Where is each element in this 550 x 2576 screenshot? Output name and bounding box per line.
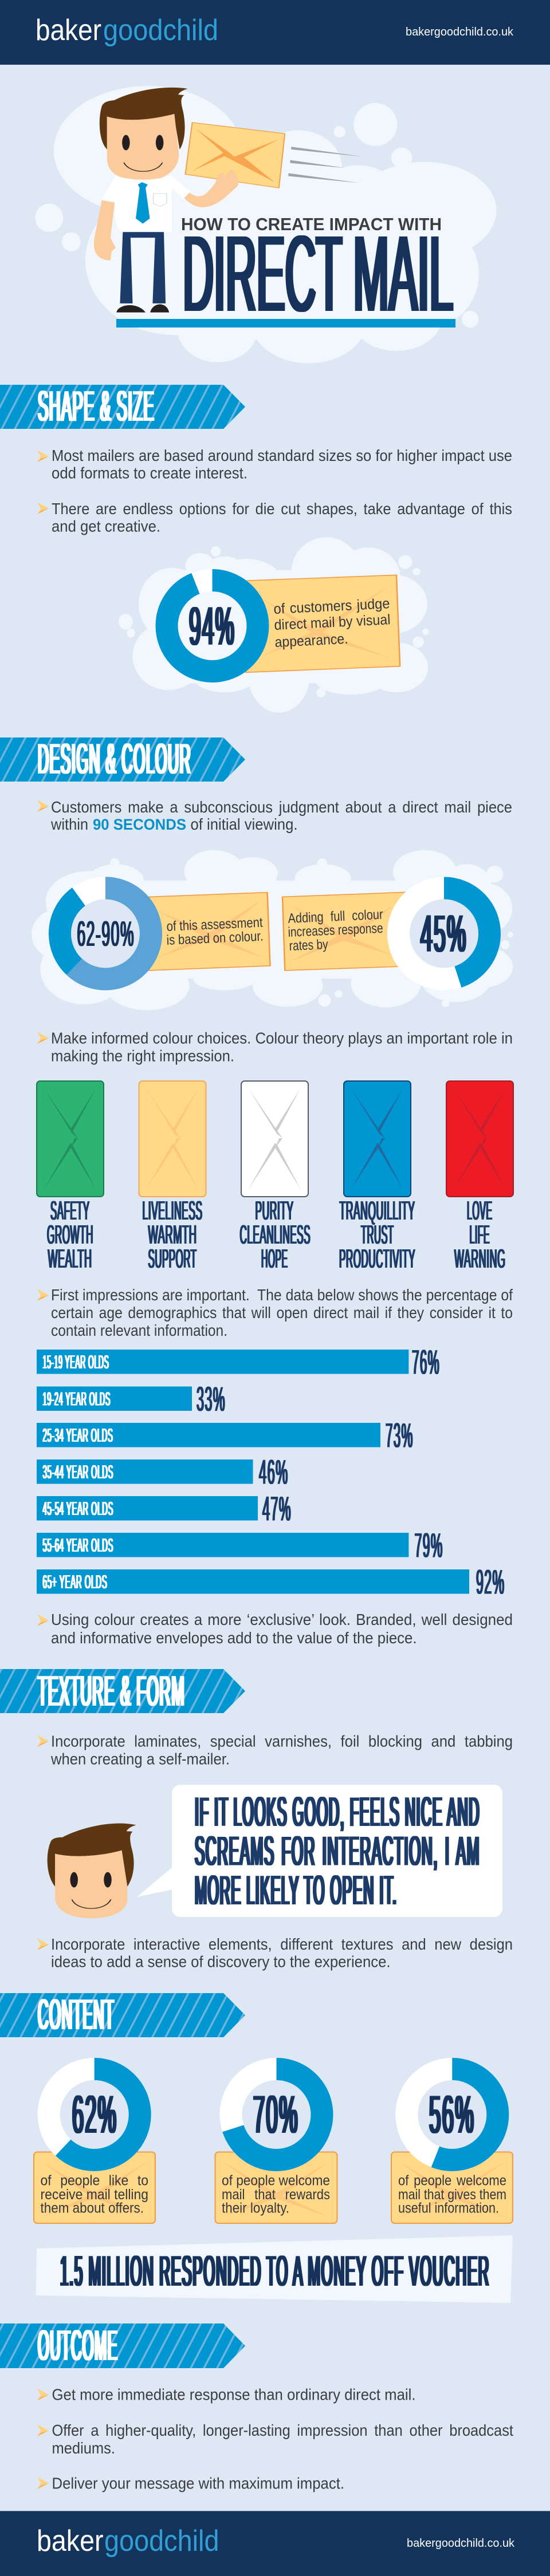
bar chart: age demographics: 79% xyxy=(415,1526,443,1564)
text block: 90 seconds: Customers make a subconscious judgment about a direct mail piece xyxy=(51,798,512,816)
text block: first impressions: First impressions are important. The data below shows the percentage of xyxy=(51,1286,513,1304)
donut chart: 45%: 45% xyxy=(421,905,467,963)
banner: shape & size: SHAPE & SIZE xyxy=(38,382,155,430)
colour card: white: HOPE xyxy=(261,1244,288,1273)
footer bar: goodchild xyxy=(104,2524,219,2558)
text: DESIGN & COLOUR xyxy=(38,735,191,783)
footer bar: baker xyxy=(37,2524,103,2558)
text block: laminates: when creating a self-mailer. xyxy=(50,1750,230,1768)
text block: colour choices: Make informed colour choices. Colour theory plays an important role in xyxy=(51,1029,513,1047)
stat card: 70%: their loyalty. xyxy=(222,2200,289,2216)
text block: first impressions xyxy=(37,1286,513,1339)
stat card: 62%: them about offers. xyxy=(40,2200,144,2216)
banner: texture & form xyxy=(0,1667,245,1715)
icon: speed lines xyxy=(288,147,363,183)
bar chart: age demographics: 19-24 YEAR OLDS xyxy=(42,1388,111,1410)
bar chart: age demographics: 33% xyxy=(197,1380,226,1418)
stat card: 62%: receive mail telling xyxy=(40,2187,148,2203)
colour card: blue xyxy=(339,1081,415,1273)
text block: shape & size bullets xyxy=(37,447,512,535)
bar chart: age demographics: 76% xyxy=(412,1343,440,1381)
banner: texture & form: TEXTURE & FORM xyxy=(38,1667,185,1715)
text block: shape & size bullets: There are endless options for die cut shapes, take advantage of this xyxy=(52,500,512,518)
envelope: response rates caption xyxy=(282,892,407,971)
stat card: 56% xyxy=(391,2069,513,2223)
text: 92% xyxy=(476,1563,505,1601)
donut chart: 45% xyxy=(399,888,489,979)
colour card: white: PURITY xyxy=(256,1196,293,1225)
text block: outcome bullets: Offer a higher-quality, longer-lasting impression than other broadcast xyxy=(52,2421,513,2439)
bar chart: age demographics: 35-44 YEAR OLDS xyxy=(42,1461,113,1482)
text: SAFETY xyxy=(50,1196,89,1225)
envelope: 94% caption: direct mail by visual xyxy=(274,612,391,633)
text: PRODUCTIVITY xyxy=(339,1244,415,1273)
bar chart: age demographics: 65+ YEAR OLDS xyxy=(42,1571,108,1592)
header bar: bakergoodchild.co.uk xyxy=(406,26,514,38)
text: CLEANLINESS xyxy=(239,1220,311,1249)
envelope: response rates caption: Adding full colour xyxy=(288,907,383,926)
colour card: blue: TRUST xyxy=(361,1220,394,1249)
donut chart: 62-90%: 62-90% xyxy=(77,914,135,954)
footer bar: bakergoodchild.co.uk xyxy=(407,2537,515,2550)
colour card: red xyxy=(446,1081,513,1273)
envelope: 94% caption: appearance. xyxy=(274,631,348,650)
envelope: response rates caption: rates by xyxy=(289,937,328,954)
text block: outcome bullets: mediums. xyxy=(52,2439,115,2457)
text block: 90 seconds: of initial viewing. xyxy=(190,815,298,833)
header bar: baker xyxy=(36,14,101,47)
text: SUPPORT xyxy=(148,1244,197,1273)
cloud: 94% background xyxy=(119,537,429,713)
bar chart: age demographics: 45-54 YEAR OLDS xyxy=(42,1498,113,1519)
text block: interactive elements: ideas to add a sense of discovery to the experience. xyxy=(51,1952,391,1971)
bar chart: age demographics: 25-34 YEAR OLDS xyxy=(42,1425,113,1446)
text block: 90 seconds: within xyxy=(50,815,88,833)
banner: outcome: OUTCOME xyxy=(38,2321,118,2369)
stat card: 70%: of people welcome xyxy=(222,2172,330,2188)
bar chart: age demographics: 47% xyxy=(262,1490,292,1528)
title xyxy=(116,214,455,334)
colour card: red: LOVE xyxy=(467,1196,493,1225)
text block: colour choices xyxy=(37,1029,513,1065)
footer bar xyxy=(0,2511,550,2576)
text block: 90 seconds xyxy=(37,798,512,833)
text block: using colour xyxy=(37,1611,513,1647)
cloud: colour stats background xyxy=(32,850,513,1010)
bar chart: age demographics: 55-64 YEAR OLDS xyxy=(42,1534,113,1556)
text block: shape & size bullets: Most mailers are based around standard sizes so for higher impact use xyxy=(52,447,512,464)
text block: laminates: Incorporate laminates, special varnishes, foil blocking and tabbing xyxy=(51,1733,513,1750)
text: WARMTH xyxy=(148,1220,197,1249)
text block: outcome bullets: Get more immediate response than ordinary direct mail. xyxy=(52,2385,416,2404)
stat card: 70%: 70% xyxy=(253,2084,299,2144)
stat card: 70%: mail that rewards xyxy=(222,2187,330,2203)
text: TRANQUILLITY xyxy=(339,1196,415,1225)
header bar xyxy=(0,0,550,65)
envelope: response rates caption: increases response xyxy=(288,921,383,940)
donut chart: 94%: 94% xyxy=(189,596,235,657)
envelope: 94% caption: of customers judge xyxy=(273,595,390,617)
envelope: assessment caption: of this assessment xyxy=(166,915,263,934)
text block: 90 seconds: 90 SECONDS xyxy=(93,816,186,833)
stat card: 56%: useful information. xyxy=(398,2200,499,2216)
stat card: 62%: of people like to xyxy=(40,2172,148,2188)
text block: shape & size bullets: odd formats to create interest. xyxy=(52,464,247,482)
bar chart: age demographics: 73% xyxy=(386,1417,414,1454)
text block: first impressions: contain relevant information. xyxy=(51,1321,227,1339)
stat card: 56%: 56% xyxy=(429,2084,475,2144)
envelope: 94% caption xyxy=(246,575,400,672)
text block: outcome bullets xyxy=(37,2385,513,2492)
text block: using colour: Using colour creates a more ‘exclusive’ look. Branded, well designed xyxy=(51,1611,513,1628)
envelope: assessment caption xyxy=(149,893,270,971)
stat card: 70% xyxy=(215,2069,337,2223)
text block: colour choices: making the right impression. xyxy=(51,1047,234,1065)
banner: content: CONTENT xyxy=(38,1990,115,2038)
bar chart: age demographics: 46% xyxy=(259,1453,289,1491)
colour card: yellow xyxy=(139,1081,206,1273)
speech bubble quote xyxy=(137,1785,502,1917)
colour card: green xyxy=(37,1081,104,1273)
text block: shape & size bullets: and get creative. xyxy=(52,518,160,535)
donut chart: 94% xyxy=(167,581,258,671)
colour card: white xyxy=(239,1081,311,1273)
colour card: red: LIFE xyxy=(470,1220,490,1249)
text block: laminates xyxy=(37,1733,513,1768)
stat card: 62%: 62% xyxy=(72,2084,117,2144)
text block: using colour: and informative envelopes add to the value of the piece. xyxy=(51,1629,417,1647)
callout: voucher xyxy=(36,2235,513,2303)
text: WEALTH xyxy=(48,1244,92,1273)
icon: man's head xyxy=(48,1824,136,1918)
bar chart: age demographics: 15-19 YEAR OLDS xyxy=(42,1351,109,1372)
title: HOW TO CREATE IMPACT WITH xyxy=(181,215,442,234)
stat card: 62% xyxy=(34,2069,155,2223)
illustration: man holding envelope xyxy=(94,88,363,313)
banner: shape & size xyxy=(0,382,245,430)
header bar: goodchild xyxy=(103,14,218,47)
text: LIVELINESS xyxy=(142,1196,203,1225)
text: GROWTH xyxy=(47,1220,93,1249)
banner: design & colour xyxy=(0,735,245,783)
donut chart: 62-90% xyxy=(60,888,151,979)
text block: interactive elements xyxy=(37,1935,513,1971)
text block: outcome bullets: Deliver your message with maximum impact. xyxy=(52,2475,344,2492)
stat card: 56%: of people welcome xyxy=(398,2172,506,2188)
hero cloud background xyxy=(35,86,497,364)
envelope: assessment caption: is based on colour. xyxy=(166,929,264,948)
bar chart: age demographics xyxy=(37,1343,505,1601)
text block: interactive elements: Incorporate interactive elements, different textures and new design xyxy=(51,1935,513,1953)
stat card: 56%: mail that gives them xyxy=(398,2187,506,2203)
